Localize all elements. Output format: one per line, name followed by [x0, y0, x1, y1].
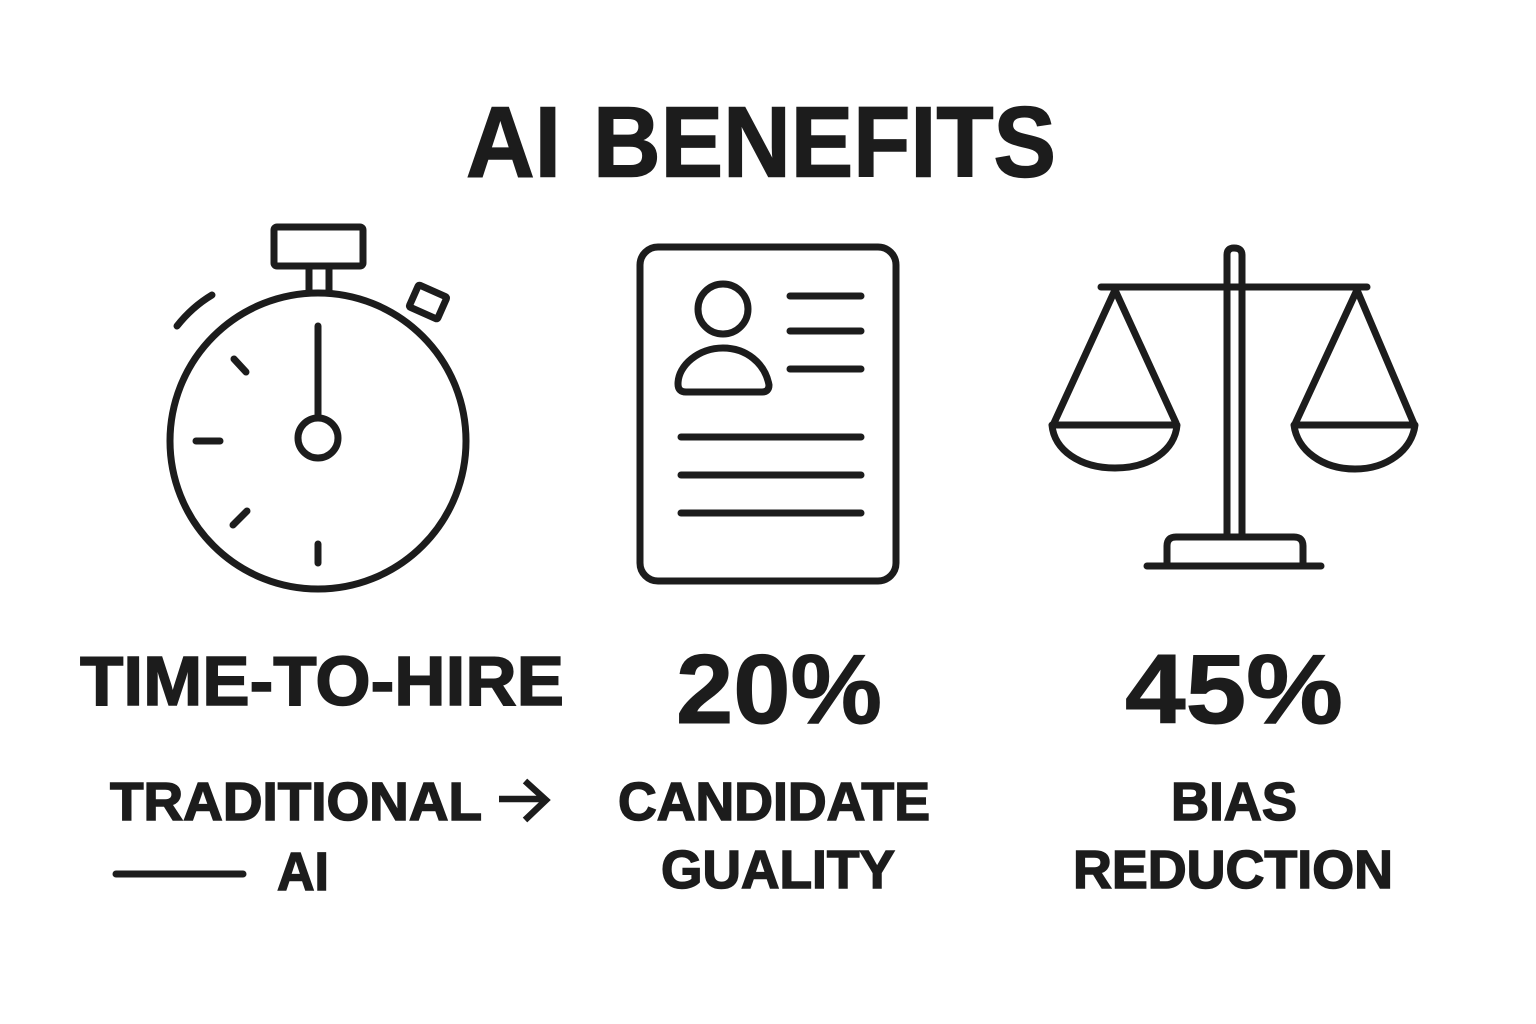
title: BENEFITS — [593, 86, 1056, 198]
line — [116, 870, 243, 878]
label: candidate quality: GUALITY — [661, 840, 895, 900]
stat: 20%: 20% — [676, 634, 882, 744]
title: AI — [466, 86, 561, 198]
arrow — [499, 781, 546, 820]
icon: stopwatch — [170, 227, 466, 589]
label: bias reduction: REDUCTION — [1073, 840, 1393, 900]
label: candidate quality — [618, 772, 930, 900]
icon: candidate resume — [640, 247, 896, 581]
label: bias reduction: BIAS — [1171, 772, 1297, 832]
label: bias reduction — [1073, 772, 1393, 900]
stat: 45%: 45% — [1125, 634, 1343, 744]
icon: balance scale — [1052, 248, 1415, 566]
label: candidate quality: CANDIDATE — [618, 772, 930, 832]
label: traditional to AI: TRADITIONAL — [110, 772, 482, 832]
heading: time-to-hire: TIME-TO-HIRE — [80, 642, 564, 720]
label: traditional to AI — [110, 772, 546, 902]
label: traditional to AI: AI — [277, 842, 329, 902]
